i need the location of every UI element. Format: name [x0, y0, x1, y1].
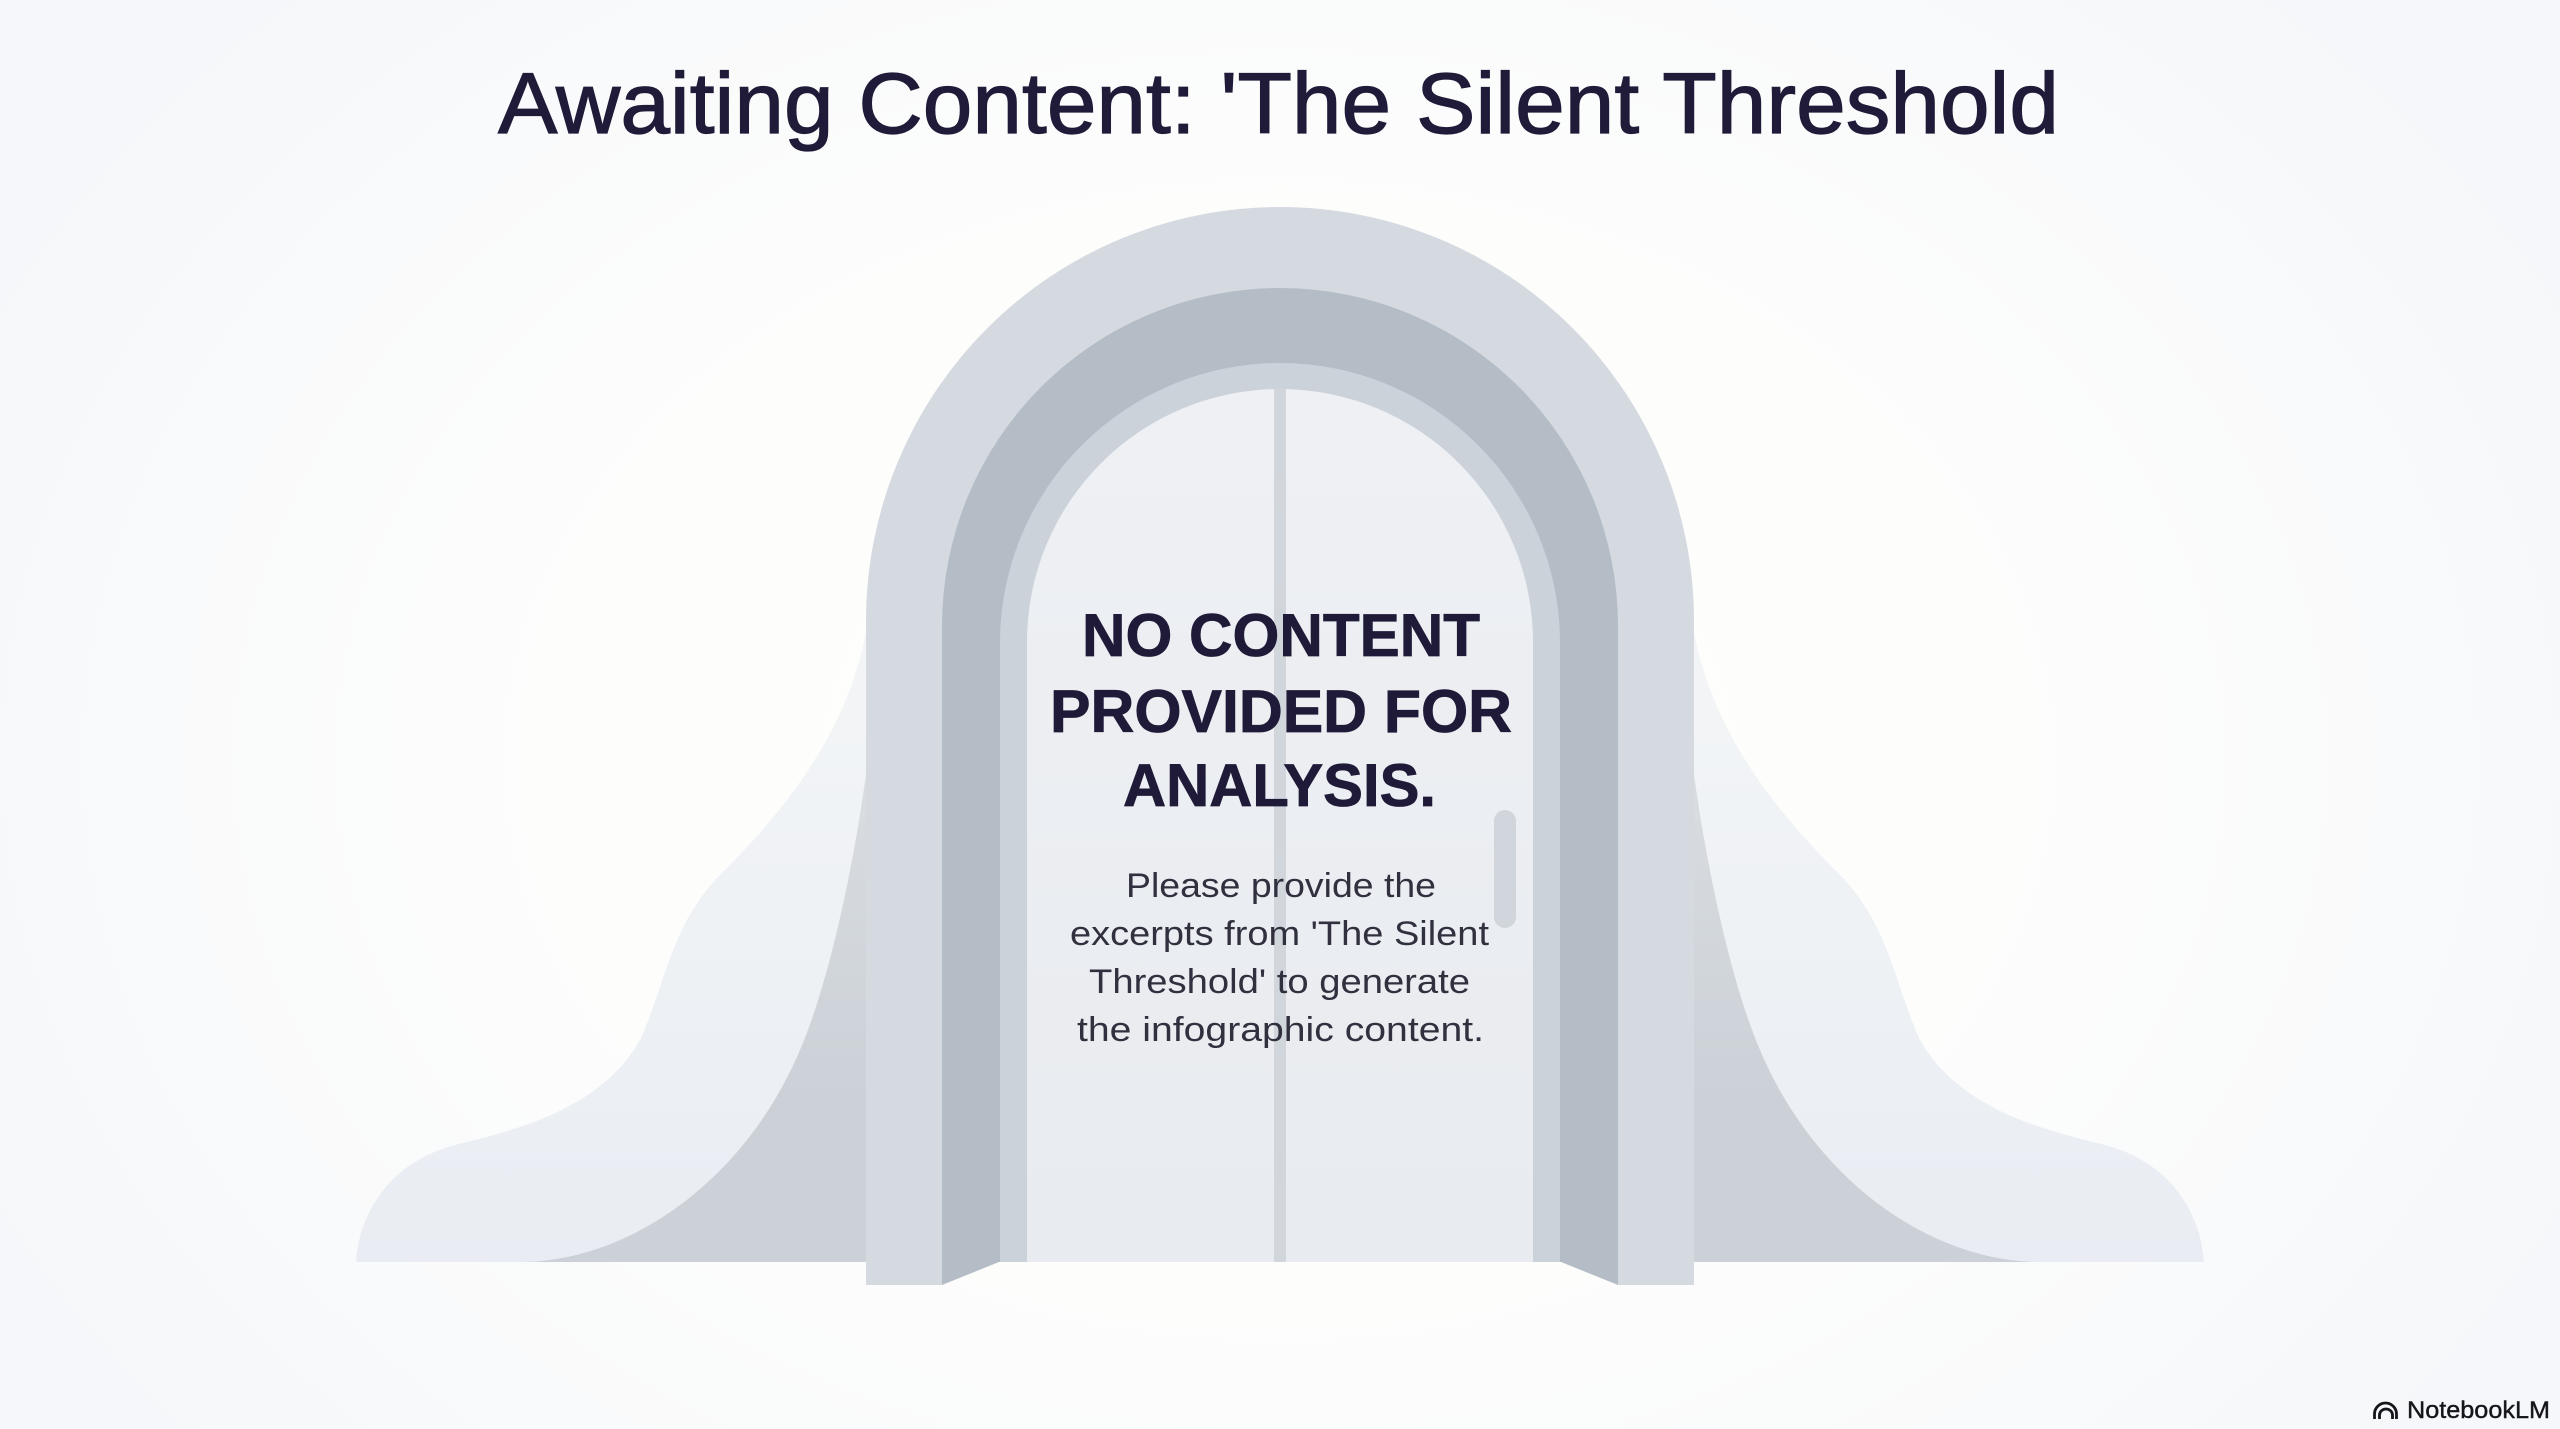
door centre seam [1274, 389, 1286, 1262]
left curtain [356, 620, 868, 1262]
right curtain [1692, 620, 2204, 1262]
left flare shadow [519, 760, 868, 1262]
heading: no content [1050, 602, 1512, 819]
heading: no content: ANALYSIS. [1123, 752, 1436, 819]
body text: instructions: excerpts from 'The Silent [1070, 915, 1490, 953]
recessed arch band [942, 288, 1618, 1285]
right flare shadow [1692, 760, 2041, 1262]
NotebookLM badge: NotebookLM [2407, 1397, 2550, 1424]
outer arch [866, 207, 1694, 1285]
heading: no content: NO CONTENT [1082, 602, 1480, 669]
inner arch frame [1000, 363, 1560, 1262]
title: Awaiting Content: 'The Silent Threshold [498, 56, 2059, 152]
door handle [1494, 810, 1516, 928]
heading: no content: PROVIDED FOR [1050, 678, 1512, 745]
door panels [1027, 389, 1533, 1262]
body text: instructions: Threshold' to generate [1089, 963, 1470, 1001]
body text: instructions: Please provide the [1126, 867, 1436, 905]
body text: instructions: the infographic content. [1077, 1011, 1484, 1049]
doorway arch [866, 207, 1694, 1285]
body text: instructions [1070, 867, 1490, 1049]
icon: NotebookLM arcs [2374, 1403, 2396, 1419]
